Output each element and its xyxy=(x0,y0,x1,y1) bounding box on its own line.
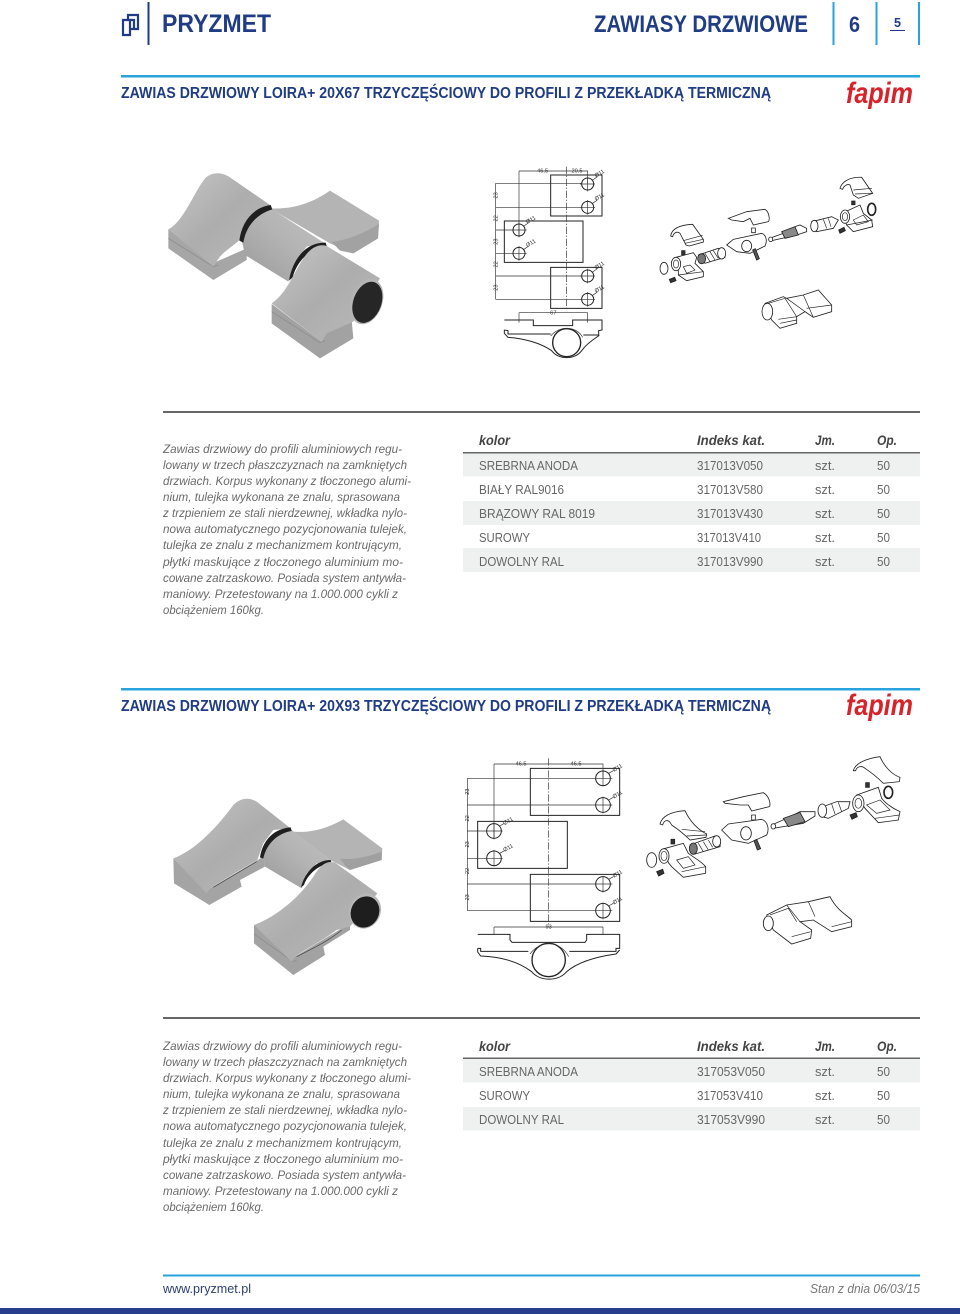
technical drawing: 20x93: Ø11 xyxy=(612,763,624,774)
table 1: colours and catalogue numbers: 317013V410 xyxy=(697,531,761,545)
body text: description 2: tulejka ze znalu z mechanizmem kontrującym, xyxy=(163,1136,402,1150)
table 1: colours and catalogue numbers: DOWOLNY RAL xyxy=(479,555,564,569)
cross-section profile xyxy=(504,313,602,358)
table 2: colours and catalogue numbers: 50 xyxy=(877,1089,890,1103)
technical drawing: 20x67: 46.5 xyxy=(537,169,548,175)
exploded view: 20x67 xyxy=(660,177,876,328)
technical drawing: 20x67: 23 xyxy=(493,239,499,245)
technical drawing: 20x67: 67 xyxy=(550,310,556,316)
body text: description 1: nowa automatycznego pozycjonowania tulejek, xyxy=(163,522,407,536)
body text: description 2: lowany w trzech płaszczyznach na zamkniętych xyxy=(163,1055,407,1069)
technical drawing: 20x93: Ø11 xyxy=(612,896,624,906)
technical drawing: 20x93: Ø11 xyxy=(503,843,514,854)
brand logo: fapim: fapim xyxy=(846,77,913,110)
body text: description 2: nium, tulejka wykonana ze znalu, sprasowana xyxy=(163,1087,400,1101)
technical drawing: 20x67 xyxy=(493,167,606,358)
technical drawing: 20x93: Ø11 xyxy=(612,869,624,880)
body text: description 2: nowa automatycznego pozycjonowania tulejek, xyxy=(163,1119,407,1133)
body text: description 1: płytki maskujące z tłoczonego aluminium mo- xyxy=(162,555,403,569)
table 2: colours and catalogue numbers: Indeks kat. xyxy=(697,1038,765,1054)
cross-section profile xyxy=(478,927,620,979)
technical drawing: 20x93: 22 xyxy=(465,868,471,874)
table 2: colours and catalogue numbers: DOWOLNY RAL xyxy=(479,1113,564,1127)
technical drawing: 20x93: 46.5 xyxy=(515,762,527,768)
technical drawing: 20x67: 22 xyxy=(493,261,499,267)
table 2: colours and catalogue numbers: SUROWY xyxy=(479,1089,531,1103)
body text: description 2: cowane zatrzaskowo. Posiada system antywła- xyxy=(163,1168,406,1182)
date stamp: Stan z dnia 06/03/15 xyxy=(810,1282,920,1296)
table 2: colours and catalogue numbers: szt. xyxy=(815,1089,835,1103)
body text: description 2: drzwiach. Korpus wykonany z tłoczonego alumi- xyxy=(163,1071,411,1085)
technical drawing: 20x67: Ø11 xyxy=(525,239,537,249)
table 1: colours and catalogue numbers: BRĄZOWY RAL 8019 xyxy=(479,507,595,521)
technical drawing: 20x93: Ø11 xyxy=(612,790,624,800)
table 1: colours and catalogue numbers xyxy=(463,432,920,572)
page footer xyxy=(0,1274,960,1314)
body text: description 2: Zawias drzwiowy do profili aluminiowych regu- xyxy=(162,1039,402,1053)
table 2: colours and catalogue numbers: 50 xyxy=(877,1065,890,1079)
brand logo: fapim: fapim xyxy=(846,689,913,722)
technical drawing: 20x93 xyxy=(465,758,624,979)
table 1: colours and catalogue numbers: szt. xyxy=(815,531,835,545)
table 1: colours and catalogue numbers: kolor xyxy=(479,432,511,448)
table 2: colours and catalogue numbers: Op. xyxy=(877,1038,897,1054)
body text: description 1: Zawias drzwiowy do profili aluminiowych regu- xyxy=(162,442,402,456)
section 2 title: ZAWIAS DRZWIOWY LOIRA+ 20X93 TRZYCZĘŚCIOWY DO PROFILI Z PRZEKŁADKĄ TERMICZNĄ xyxy=(121,696,771,715)
body text: description 1: drzwiach. Korpus wykonany z tłoczonego alumi- xyxy=(163,474,411,488)
technical drawing: 20x67: Ø11 xyxy=(525,215,537,226)
technical drawing: 20x67: 23 xyxy=(493,285,499,291)
technical drawing: 20x67: Ø11 xyxy=(594,169,606,179)
table 1: colours and catalogue numbers: 317013V050 xyxy=(697,459,763,473)
section 2 heading bar xyxy=(121,688,920,722)
section 1 heading bar xyxy=(121,75,920,110)
technical drawing: 20x93: 22 xyxy=(465,815,471,821)
chapter number: 6 xyxy=(849,12,860,37)
bottom bar xyxy=(0,1308,960,1314)
technical drawing: 20x93: 23 xyxy=(465,841,471,847)
body text: description 2 xyxy=(162,1017,920,1214)
technical drawing: 20x67: 22 xyxy=(493,215,499,221)
body text: description 1: maniowy. Przetestowany na 1.000.000 cykli z xyxy=(163,587,398,601)
table 1: colours and catalogue numbers: szt. xyxy=(815,507,835,521)
body text: description 2: maniowy. Przetestowany na 1.000.000 cykli z xyxy=(163,1184,398,1198)
chapter title: ZAWIASY DRZWIOWE xyxy=(594,11,808,38)
technical drawing: 20x67: Ø11 xyxy=(594,192,606,203)
assembled hinge xyxy=(763,897,852,944)
body text: description 1 xyxy=(162,411,920,617)
section 1 title: ZAWIAS DRZWIOWY LOIRA+ 20X67 TRZYCZĘŚCIOWY DO PROFILI Z PRZEKŁADKĄ TERMICZNĄ xyxy=(121,83,771,102)
product photo: 20x93 hinge xyxy=(173,799,387,975)
table 2: colours and catalogue numbers: 317053V050 xyxy=(697,1065,765,1079)
table 2: colours and catalogue numbers: SREBRNA ANODA xyxy=(479,1065,579,1079)
table 2: colours and catalogue numbers: Jm. xyxy=(815,1038,835,1054)
table 1: colours and catalogue numbers: Indeks kat. xyxy=(697,432,765,448)
technical drawing: 20x67: 20.5 xyxy=(571,169,583,175)
assembled hinge xyxy=(762,290,832,328)
table 2: colours and catalogue numbers: szt. xyxy=(815,1065,835,1079)
table 1: colours and catalogue numbers: szt. xyxy=(815,483,835,497)
table 1: colours and catalogue numbers: 317013V990 xyxy=(697,555,763,569)
technical drawing: 20x93: 23 xyxy=(465,894,471,900)
table 2: colours and catalogue numbers: szt. xyxy=(815,1113,835,1127)
body text: description 1: tulejka ze znalu z mechanizmem kontrującym, xyxy=(163,538,402,552)
table 1: colours and catalogue numbers: 317013V430 xyxy=(697,507,763,521)
technical drawing: 20x93: 23 xyxy=(465,789,471,795)
body text: description 2: obciążeniem 160kg. xyxy=(163,1200,264,1214)
body text: description 2: płytki maskujące z tłoczonego aluminium mo- xyxy=(162,1152,403,1166)
body text: description 1: lowany w trzech płaszczyznach na zamkniętych xyxy=(163,458,407,472)
body text: description 1: cowane zatrzaskowo. Posiada system antywła- xyxy=(163,571,406,585)
table 2: colours and catalogue numbers: 50 xyxy=(877,1113,890,1127)
table 1: colours and catalogue numbers: szt. xyxy=(815,555,835,569)
technical drawing: 20x93: 93 xyxy=(546,925,552,931)
technical drawing: 20x67: Ø11 xyxy=(594,261,606,271)
table 1: colours and catalogue numbers: 317013V580 xyxy=(697,483,763,497)
table 1: colours and catalogue numbers: 50 xyxy=(877,459,890,473)
table 1: colours and catalogue numbers: Op. xyxy=(877,432,897,448)
technical drawing: 20x93: Ø11 xyxy=(503,817,514,827)
table 1: colours and catalogue numbers: 50 xyxy=(877,483,890,497)
body text: description 1: obciążeniem 160kg. xyxy=(163,603,264,617)
body text: description 1: z trzpieniem ze stali nierdzewnej, wkładka nylo- xyxy=(162,506,407,520)
table 1: colours and catalogue numbers: SREBRNA ANODA xyxy=(479,459,579,473)
technical drawing: 20x93: 46.5 xyxy=(570,762,582,768)
icon: Pryzmet logo mark xyxy=(123,15,138,35)
technical drawing: 20x67: Ø11 xyxy=(594,284,606,295)
exploded view: 20x93 xyxy=(647,757,900,944)
product photo: 20x67 hinge xyxy=(168,173,389,358)
table 1: colours and catalogue numbers: szt. xyxy=(815,459,835,473)
body text: description 2: z trzpieniem ze stali nierdzewnej, wkładka nylo- xyxy=(162,1103,407,1117)
table 2: colours and catalogue numbers: 317053V410 xyxy=(697,1089,763,1103)
table 2: colours and catalogue numbers xyxy=(463,1038,920,1130)
table 2: colours and catalogue numbers: kolor xyxy=(479,1038,511,1054)
table 1: colours and catalogue numbers: 50 xyxy=(877,555,890,569)
technical drawing: 20x67: 23 xyxy=(493,192,499,198)
table 1: colours and catalogue numbers: 50 xyxy=(877,531,890,545)
table 1: colours and catalogue numbers: BIAŁY RAL9016 xyxy=(479,483,564,497)
table 1: colours and catalogue numbers: Jm. xyxy=(815,432,835,448)
table 1: colours and catalogue numbers: 50 xyxy=(877,507,890,521)
page number xyxy=(890,15,905,31)
brand name: PRYZMET xyxy=(162,10,271,38)
table 1: colours and catalogue numbers: SUROWY xyxy=(479,531,531,545)
page number: 5 xyxy=(894,15,901,30)
page header xyxy=(123,2,920,45)
body text: description 1: nium, tulejka wykonana ze znalu, sprasowana xyxy=(163,490,400,504)
table 2: colours and catalogue numbers: 317053V990 xyxy=(697,1113,765,1127)
website: www.pryzmet.pl xyxy=(162,1281,251,1296)
